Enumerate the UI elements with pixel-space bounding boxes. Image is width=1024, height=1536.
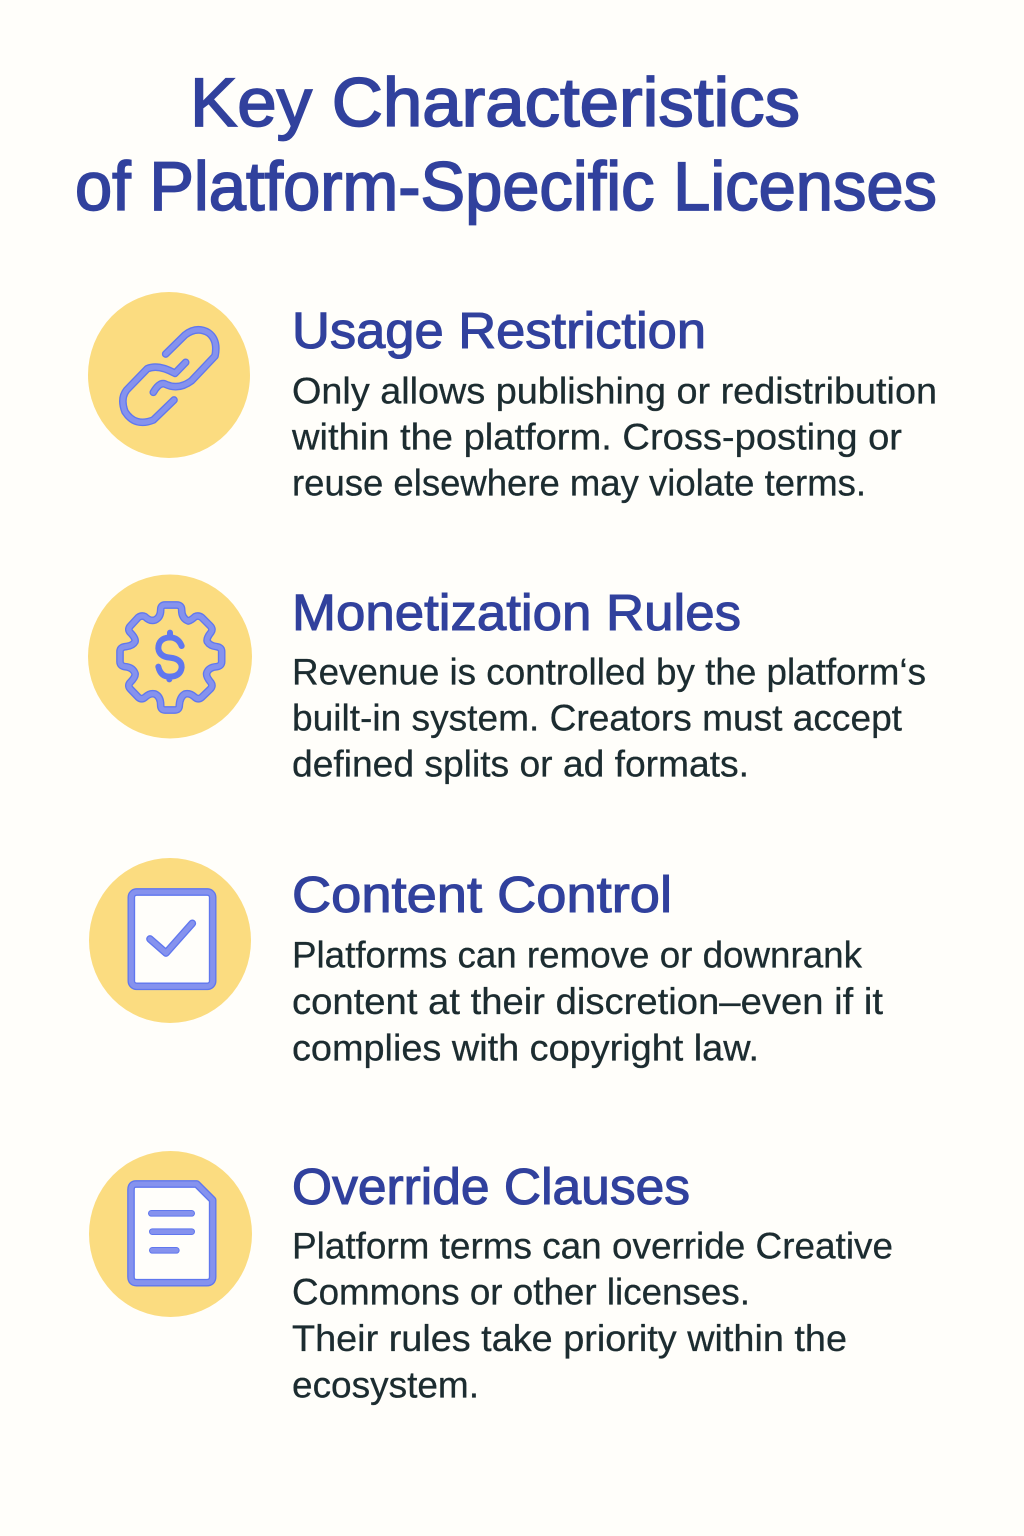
title: [75, 64, 937, 225]
panel: override clauses: [89, 1151, 893, 1406]
text: usage restriction: reuse elsewhere may violate terms.: [292, 462, 866, 504]
title: of Platform-Specific Licenses: [75, 148, 937, 225]
text: override clauses: Commons or other licenses.: [292, 1270, 750, 1312]
text: content control: [292, 934, 884, 1068]
title: Key Characteristics: [190, 64, 800, 141]
icon: document: [89, 1151, 252, 1317]
text: content control: Platforms can remove or downrank: [292, 934, 862, 976]
text: usage restriction: Only allows publishing or redistribution: [292, 370, 937, 412]
panel: content control: [89, 858, 884, 1068]
text: monetization rules: built-in system. Creators must accept: [292, 696, 903, 738]
panel: monetization rules: [88, 574, 926, 784]
text: monetization rules: Revenue is controlled by the platform‘s: [292, 650, 926, 692]
text: override clauses: Platform terms can override Creative: [292, 1224, 893, 1266]
icon: gear with dollar sign: [88, 574, 252, 738]
icon: chain link: [88, 292, 250, 458]
text: override clauses: Their rules take priority within the: [292, 1317, 847, 1359]
heading: content control: Content Control: [292, 866, 672, 923]
heading: monetization rules: Monetization Rules: [292, 584, 741, 641]
heading: usage restriction: Usage Restriction: [292, 302, 706, 359]
icon: checklist page: [89, 858, 251, 1023]
text: override clauses: ecosystem.: [292, 1364, 479, 1406]
text: usage restriction: [291, 370, 937, 504]
text: content control: content at their discretion–even if it: [292, 980, 884, 1022]
panel: usage restriction: [88, 292, 937, 504]
text: content control: complies with copyright law.: [292, 1026, 759, 1068]
text: monetization rules: defined splits or ad formats.: [292, 742, 749, 784]
text: override clauses: [292, 1224, 893, 1406]
text: usage restriction: within the platform. Cross-posting or: [291, 416, 902, 458]
heading: override clauses: Override Clauses: [292, 1158, 690, 1215]
text: monetization rules: [292, 650, 926, 784]
